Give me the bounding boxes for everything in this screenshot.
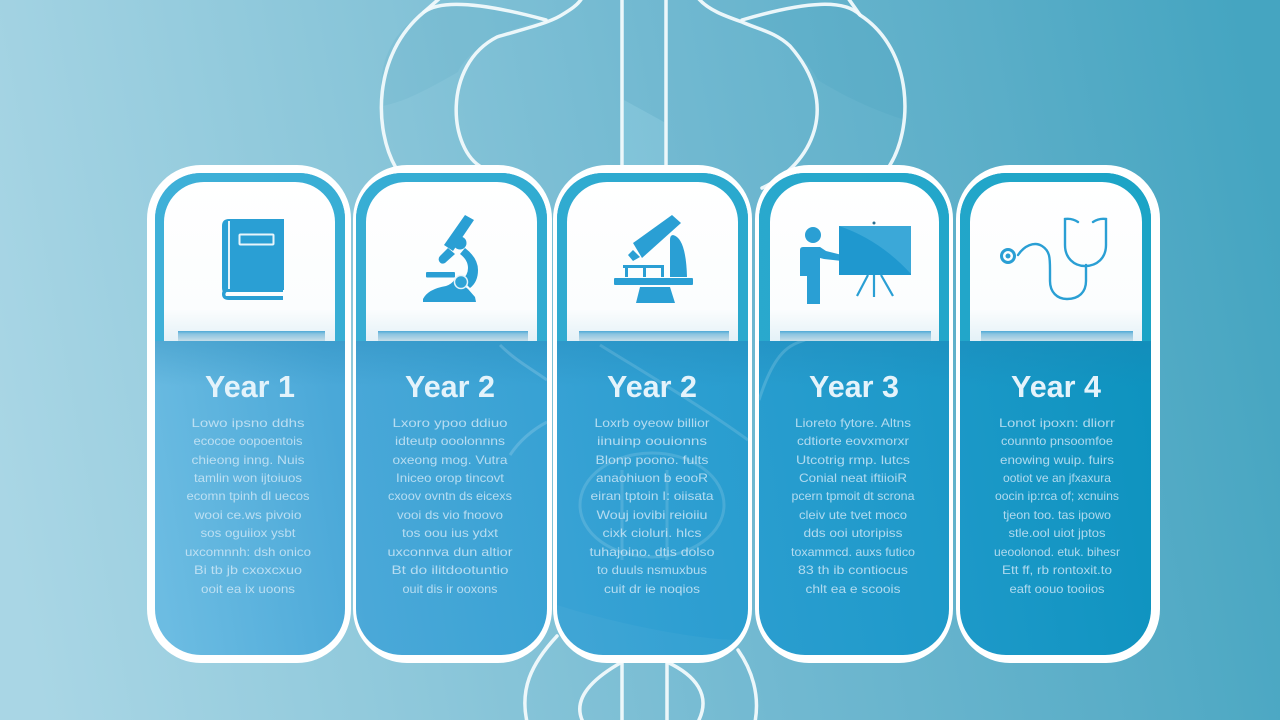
body text: ecomn tpinh dl uecos <box>186 489 310 503</box>
white icon area <box>567 182 738 341</box>
year heading: Year 4 <box>1011 370 1101 404</box>
icon: book <box>222 219 284 300</box>
body text: dds ooi utoripiss <box>804 526 902 540</box>
strip <box>579 331 729 341</box>
card body <box>759 173 949 655</box>
caduceus outline, top <box>381 0 905 188</box>
body text: Bi tb jb cxoxcxuo <box>194 563 302 577</box>
body text: ooit ea ix uoons <box>201 582 295 596</box>
icon: microscope <box>423 215 478 302</box>
body text: chlt ea e scoois <box>806 582 900 596</box>
body text: Utcotrig rmp. lutcs <box>796 453 910 467</box>
body text: 83 th ib contiocus <box>798 563 908 577</box>
strip <box>378 331 528 341</box>
body text <box>388 416 512 596</box>
icon: presenter at board <box>800 222 911 304</box>
card frame top <box>557 173 748 341</box>
card top shade <box>960 341 1151 386</box>
card top shade <box>759 341 949 386</box>
body text <box>994 416 1120 596</box>
body text: pcern tpmoit dt scrona <box>792 489 915 503</box>
panel: Year 2 microscope <box>356 169 548 659</box>
white icon area <box>164 182 335 341</box>
card body <box>356 173 547 655</box>
body text: toxammcd. auxs futico <box>791 545 915 559</box>
body text: cleiv ute tvet moco <box>799 508 907 522</box>
body text: to duuls nsmuxbus <box>597 563 707 577</box>
card body <box>557 173 748 655</box>
icon: stethoscope <box>1002 219 1106 299</box>
strip <box>178 331 325 341</box>
body text: Blonp poono. fults <box>596 453 708 467</box>
body text: Loxrb oyeow billior <box>594 416 710 430</box>
strip <box>780 331 931 341</box>
body text: ecocoe oopoentois <box>194 434 302 448</box>
body text: Lioreto fytore. Altns <box>795 416 911 430</box>
body text: Iniceo orop tincovt <box>396 471 505 485</box>
year heading: Year 2 <box>607 370 697 404</box>
card frame top <box>960 173 1151 341</box>
body text: tjeon too. tas ipowo <box>1003 508 1111 522</box>
card lower swoosh <box>557 605 740 655</box>
body text: oxeong mog. Vutra <box>392 453 508 467</box>
body text: cuit dr ie noqios <box>604 582 700 596</box>
body text: sos oguiiox ysbt <box>200 526 296 540</box>
body text: Wouj iovibi reioiiu <box>596 508 708 522</box>
card frame top <box>155 173 345 341</box>
year heading: Year 2 <box>405 370 495 404</box>
year heading: Year 3 <box>809 370 899 404</box>
body text: cixk cioluri. hlcs <box>602 526 702 540</box>
body text: eiran tptoin I: oiisata <box>590 489 714 503</box>
body text: cxoov ovntn ds eicexs <box>388 489 512 503</box>
body text: Lowo ipsno ddhs <box>192 416 304 430</box>
body text: ouit dis ir ooxons <box>402 582 498 596</box>
body text: tos oou ius ydxt <box>402 526 499 540</box>
body text: tuhajoino. dtis dolso <box>590 545 715 559</box>
panel: Year 3 <box>759 169 949 659</box>
strip <box>981 331 1133 341</box>
body text <box>185 416 311 596</box>
card top shade <box>557 341 748 386</box>
body text: idteutp ooolonnns <box>395 434 505 448</box>
white icon area <box>366 182 537 341</box>
body text: chieong inng. Nuis <box>192 453 304 467</box>
body text: ootiot ve an jfxaxura <box>1003 471 1111 485</box>
body text <box>791 416 915 596</box>
body text: oocin ip:rca of; xcnuins <box>995 489 1119 503</box>
card decoration <box>500 345 547 455</box>
icon: lab microscope <box>614 215 693 303</box>
body text: Conial neat iftiioiR <box>799 471 907 485</box>
body text: ueoolonod. etuk. bihesr <box>994 545 1120 559</box>
body text: eaft oouo tooiios <box>1010 582 1104 596</box>
caduceus outline, bottom <box>525 636 756 720</box>
body text: Bt do ilitdootuntio <box>392 563 509 577</box>
panel: Year 4 <box>960 169 1156 659</box>
body text: cdtiorte eovxmorxr <box>797 434 909 448</box>
white icon area <box>970 182 1142 341</box>
body text: Ett ff, rb rontoxit.to <box>1002 563 1112 577</box>
body text <box>590 416 715 596</box>
body text: uxcomnnh: dsh onico <box>185 545 311 559</box>
body text: enowing wuip. fuirs <box>1000 453 1114 467</box>
body text: Lonot ipoxn: dliorr <box>999 416 1115 430</box>
card top shade <box>356 341 547 386</box>
background soft shading <box>381 4 906 165</box>
body text: iinuinp oouionns <box>597 434 707 448</box>
card body <box>155 173 345 655</box>
card frame top <box>356 173 547 341</box>
year heading: Year 1 <box>205 370 295 404</box>
body text: Lxoro ypoo ddiuo <box>392 416 508 430</box>
panel: Year 1 <box>151 169 347 659</box>
card body <box>960 173 1151 655</box>
card frame top <box>759 173 949 341</box>
body text: wooi ce.ws pivoio <box>193 508 302 522</box>
card decoration <box>759 340 805 400</box>
body text: anaohiuon b eooR <box>596 471 708 485</box>
card decoration <box>580 345 748 560</box>
body text: uxconnva dun altior <box>388 545 512 559</box>
white icon area <box>770 182 939 341</box>
body text: stle.ool uiot jptos <box>1008 526 1106 540</box>
body text: tamlin won ijtoiuos <box>194 471 302 485</box>
body text: vooi ds vio fnoovo <box>397 508 503 522</box>
panel: Year 2 lab <box>557 169 748 659</box>
card top shade <box>155 341 345 386</box>
body text: counnto pnsoomfoe <box>1001 434 1113 448</box>
